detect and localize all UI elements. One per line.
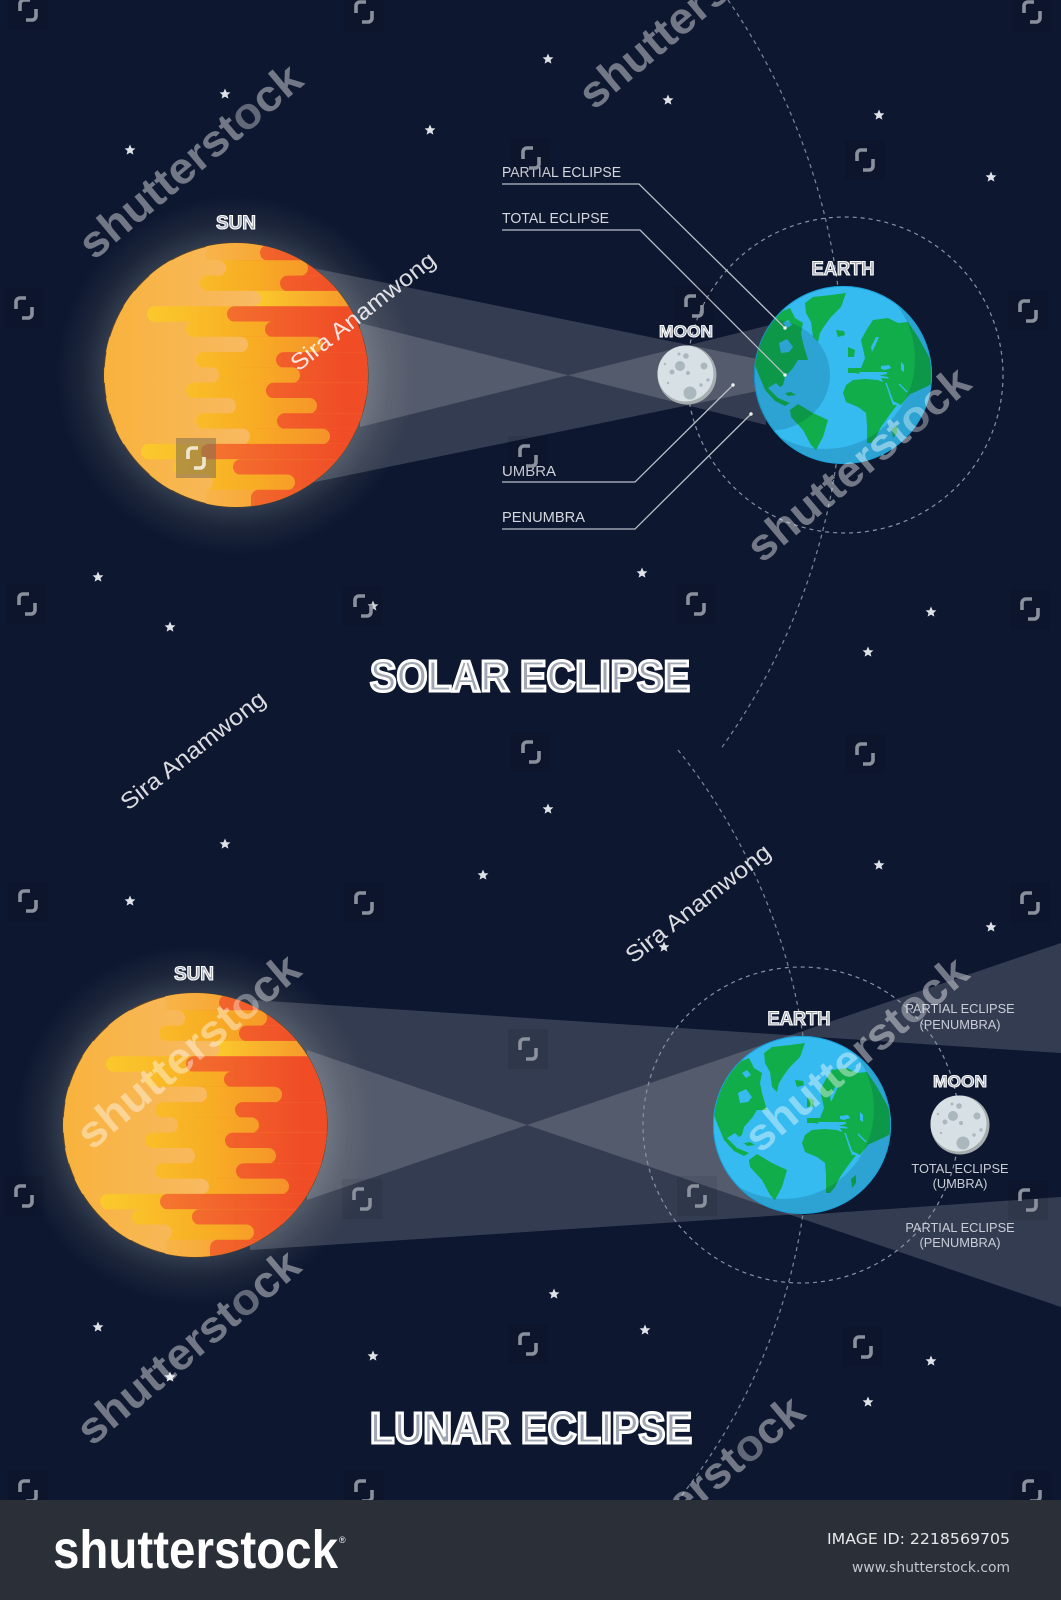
watermark: author name: Sira Anamwong bbox=[115, 685, 271, 815]
earth bbox=[694, 1019, 897, 1220]
sun bbox=[55, 983, 369, 1262]
moon orbit path bbox=[643, 967, 959, 1283]
watermark: square mark on sun bbox=[176, 438, 216, 478]
label: partial eclipse lower: PARTIAL ECLIPSE bbox=[905, 1220, 1015, 1235]
label: partial eclipse upper: (PENUMBRA) bbox=[919, 1017, 1001, 1032]
solar crossing light cone bbox=[360, 323, 770, 427]
label: total eclipse: TOTAL ECLIPSE bbox=[911, 1161, 1009, 1176]
watermark: shutterstock text: shutterstock bbox=[67, 1239, 310, 1455]
footer registered mark: ® bbox=[339, 1535, 346, 1545]
label: moon: MOON bbox=[659, 322, 713, 341]
label: earth: EARTH bbox=[812, 259, 874, 280]
callout: umbra: UMBRA bbox=[502, 463, 556, 480]
watermark: shutterstock text: shutterstock bbox=[571, 1385, 814, 1600]
watermark: shutterstock text: shutterstock bbox=[69, 53, 312, 269]
label: moon: MOON bbox=[933, 1072, 987, 1091]
footer url: www.shutterstock.com bbox=[852, 1560, 1010, 1576]
starfield bbox=[93, 54, 996, 1407]
callout: penumbra: PENUMBRA bbox=[502, 509, 585, 526]
lunar crossing light cone bbox=[307, 943, 1061, 1307]
moon bbox=[930, 1096, 990, 1154]
footer logo: shutterstock bbox=[53, 1520, 339, 1580]
callout: penumbra bbox=[502, 412, 753, 529]
watermark: shutterstock text: shutterstock bbox=[67, 943, 310, 1159]
callout: partial eclipse: PARTIAL ECLIPSE bbox=[502, 164, 621, 181]
label: partial eclipse upper: PARTIAL ECLIPSE bbox=[905, 1001, 1015, 1016]
label: sun: SUN bbox=[216, 213, 256, 234]
watermark: shutterstock text: shutterstock bbox=[735, 946, 978, 1162]
panel: lunar eclipse diagram bbox=[15, 750, 1061, 1500]
sun orbit arc bbox=[720, 0, 843, 750]
moon bbox=[658, 346, 716, 404]
footer image id: IMAGE ID: 2218569705 bbox=[827, 1530, 1010, 1548]
label: partial eclipse lower: (PENUMBRA) bbox=[919, 1235, 1001, 1250]
earth with umbra shadow bbox=[754, 286, 932, 464]
watermark: author name bbox=[115, 246, 776, 968]
watermark: author name: Sira Anamwong bbox=[285, 246, 441, 376]
callout: umbra bbox=[502, 383, 735, 482]
callout: total eclipse: TOTAL ECLIPSE bbox=[502, 210, 609, 227]
watermark: author name: Sira Anamwong bbox=[620, 838, 776, 968]
solar outer light cone bbox=[310, 268, 772, 483]
sun bbox=[96, 233, 410, 512]
earth orbit arc bbox=[678, 750, 810, 1500]
label: total eclipse: (UMBRA) bbox=[933, 1176, 987, 1191]
callout: partial eclipse bbox=[502, 164, 787, 330]
callout: total eclipse bbox=[502, 210, 787, 377]
sun glow bbox=[56, 195, 416, 555]
heading: lunar eclipse: LUNAR ECLIPSE bbox=[370, 1404, 692, 1453]
footer bar bbox=[0, 1500, 1061, 1600]
sun glow bbox=[15, 945, 375, 1305]
label: sun: SUN bbox=[174, 964, 214, 985]
panel: solar eclipse diagram bbox=[56, 0, 1003, 750]
label: earth: EARTH bbox=[768, 1009, 830, 1030]
lunar outer light cone bbox=[250, 1000, 1061, 1250]
earth orbit path bbox=[687, 217, 1003, 533]
earth umbra wedge bbox=[802, 1036, 1061, 1215]
watermark: shutterstock text: shutterstock bbox=[737, 356, 980, 572]
heading: solar eclipse: SOLAR ECLIPSE bbox=[370, 652, 690, 701]
